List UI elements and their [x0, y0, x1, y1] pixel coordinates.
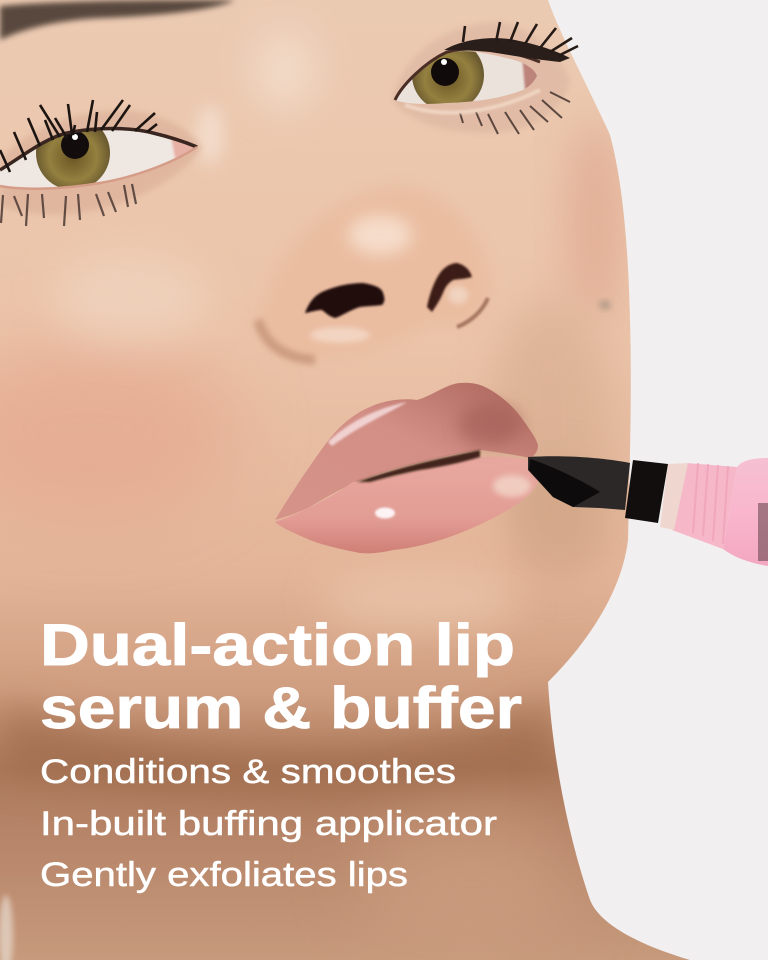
left eye [0, 100, 202, 226]
benefit 2: In-built buffing applicator [40, 805, 497, 843]
buffing bristles [529, 459, 600, 507]
right nostril [427, 263, 472, 312]
benefit 3: Gently exfoliates lips [40, 856, 408, 894]
headline: serum & buffer [40, 676, 522, 741]
eyebrow left [0, 0, 235, 40]
tube lettering mark [758, 503, 768, 561]
right eye [392, 22, 578, 134]
lips [275, 383, 538, 553]
headline: Dual-action lip [40, 613, 515, 678]
benefits list [40, 753, 497, 894]
headline [40, 613, 522, 741]
benefit 1: Conditions & smoothes [40, 753, 456, 791]
clear collar [660, 463, 688, 530]
ribbed neck [672, 463, 737, 549]
pink tube body [723, 458, 768, 566]
left nostril [305, 283, 384, 318]
product: lip serum applicator [528, 456, 768, 566]
mouth opening [357, 450, 480, 482]
black ferrule [625, 460, 668, 523]
lip highlights [375, 508, 395, 518]
brush tip [528, 456, 630, 510]
nose [258, 185, 490, 360]
